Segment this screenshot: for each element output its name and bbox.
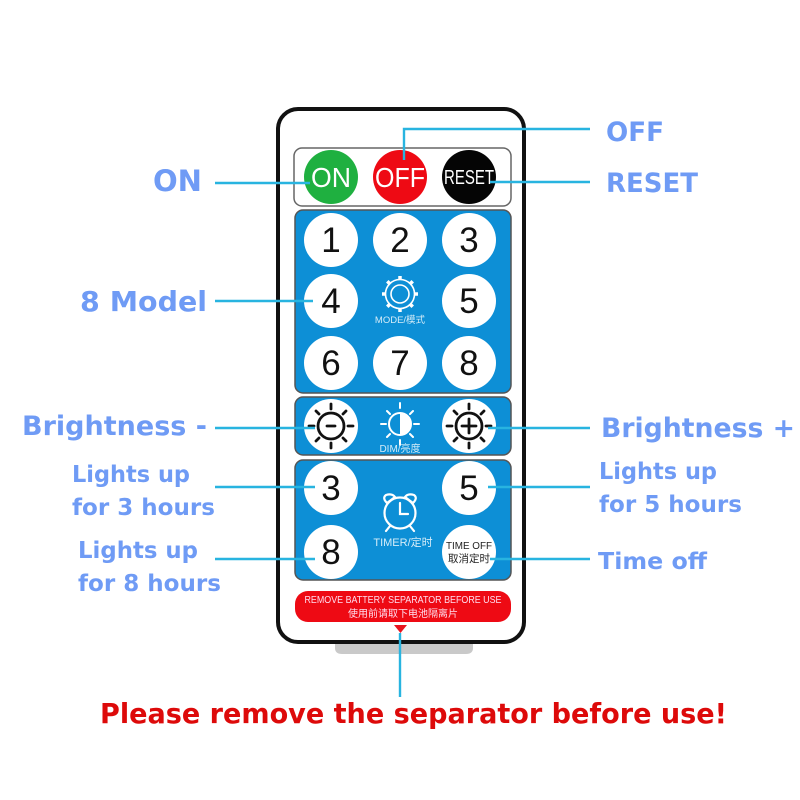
button: 6 (304, 336, 358, 390)
button: 3 (442, 213, 496, 267)
button: 1: 1 (321, 221, 341, 260)
label: lights up for 8 hours: for 8 hours (78, 571, 221, 597)
icon: half sun (381, 403, 419, 445)
panel: brightness (295, 397, 511, 455)
label: ON: ON (153, 164, 202, 198)
button: brightness plus (442, 399, 496, 453)
label: time off: Time off (598, 549, 707, 575)
leader line: time off (490, 558, 590, 560)
leader line: Brightness minus (215, 427, 315, 429)
button: 7 (373, 336, 427, 390)
label: lights up for 3 hours (72, 462, 215, 521)
label: lights up for 8 hours (78, 538, 221, 597)
button: timer 3 (304, 461, 358, 515)
label: OFF: OFF (606, 117, 664, 148)
label: lights up for 5 hours (599, 459, 742, 518)
button: RESET: RESET (444, 167, 494, 189)
label: lights up for 3 hours: Lights up (72, 462, 190, 488)
leader line: Brightness plus (488, 427, 590, 429)
remote body (278, 109, 524, 642)
leader line: 8 hours (215, 558, 315, 560)
button: 8: 8 (459, 344, 479, 383)
leader line: 5 hours (488, 486, 590, 488)
button: 3: 3 (459, 221, 479, 260)
button: timer 5: 5 (459, 469, 479, 508)
banner: remove battery separator (295, 591, 511, 622)
button: 6: 6 (321, 344, 341, 383)
button: time off: 取消定时 (448, 552, 490, 565)
label: RESET: RESET (606, 168, 699, 199)
button: timer 3: 3 (321, 469, 341, 508)
panel: timer (295, 460, 511, 580)
caption: dim: DIM/亮度 (379, 442, 421, 455)
button: OFF: OFF (375, 162, 425, 193)
button: 5: 5 (459, 282, 479, 321)
panel: power buttons (294, 148, 511, 206)
button: time off (442, 525, 496, 579)
label: lights up for 8 hours: Lights up (78, 538, 198, 564)
leader line: RESET (490, 181, 590, 183)
label: Brightness minus: Brightness - (22, 411, 207, 442)
banner: remove battery separator: REMOVE BATTERY SEPARATOR BEFORE USE (304, 595, 502, 606)
button: ON: ON (311, 162, 351, 193)
leader line: OFF (404, 129, 590, 160)
button: 4 (304, 274, 358, 328)
label: Brightness plus: Brightness + (601, 413, 795, 444)
leader line: 8 Model (215, 300, 313, 302)
button: 1 (304, 213, 358, 267)
button: 8 (442, 336, 496, 390)
label: lights up for 5 hours: Lights up (599, 459, 717, 485)
caption: mode: MODE/模式 (375, 314, 426, 326)
button: 2: 2 (390, 221, 410, 260)
button: RESET (442, 150, 496, 204)
icon: gear (382, 276, 418, 312)
leader line: ON (215, 182, 310, 184)
leader line: 3 hours (215, 486, 315, 488)
button: timer 5 (442, 461, 496, 515)
button: OFF (373, 150, 427, 204)
button: 7: 7 (390, 344, 410, 383)
leader line: separator (399, 633, 401, 697)
label: lights up for 3 hours: for 3 hours (72, 495, 215, 521)
label: 8 Model: 8 Model (80, 285, 207, 318)
label: lights up for 5 hours: for 5 hours (599, 492, 742, 518)
button: timer 8: 8 (321, 533, 341, 572)
button: 4: 4 (321, 282, 341, 321)
icon: red pointer triangle (394, 625, 407, 633)
button: timer 8 (304, 525, 358, 579)
banner: remove battery separator: 使用前请取下电池隔离片 (348, 607, 458, 620)
caption: timer: TIMER/定时 (373, 535, 433, 549)
button: brightness minus (304, 399, 358, 453)
icon: alarm clock (384, 494, 416, 531)
remote bottom tab (335, 642, 473, 654)
button: 5 (442, 274, 496, 328)
button: ON (304, 150, 358, 204)
button: 2 (373, 213, 427, 267)
button: time off: TIME OFF (446, 540, 492, 552)
panel: mode buttons (295, 210, 511, 393)
warning text: Please remove the separator before use! (100, 697, 727, 730)
